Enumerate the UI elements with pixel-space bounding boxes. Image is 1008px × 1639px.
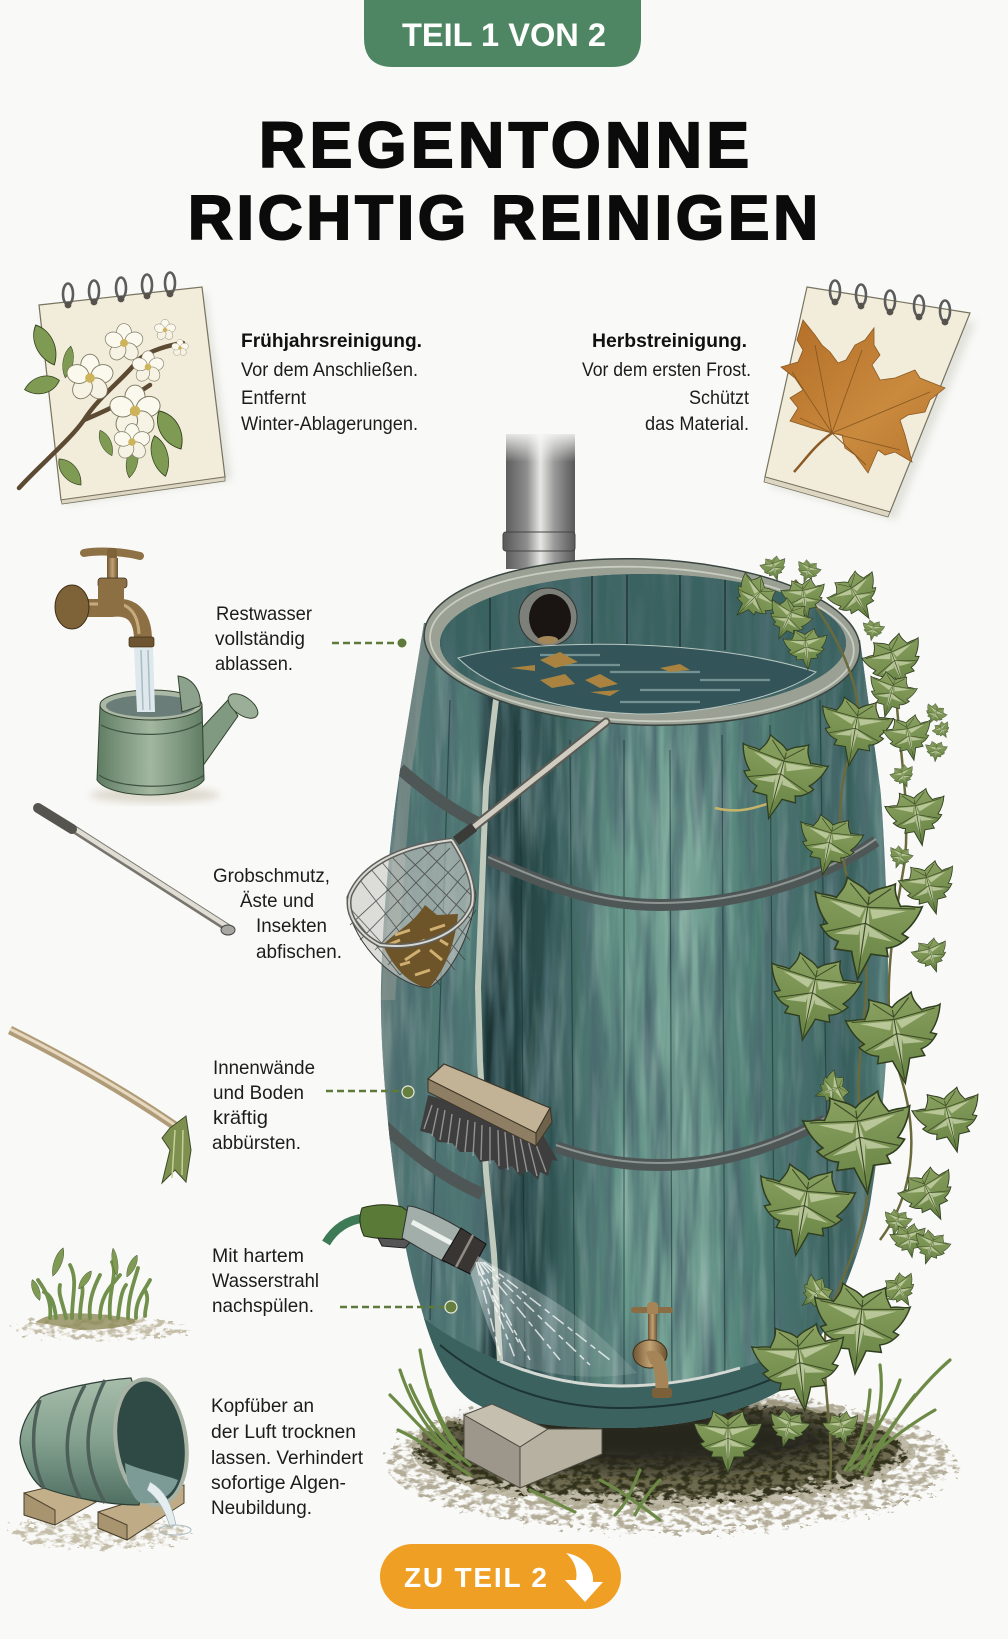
title (188, 109, 818, 253)
text: autumn cleaning: Schützt (689, 387, 750, 409)
text: rinse: Wasserstrahl (212, 1270, 319, 1292)
wood blocks (24, 1487, 96, 1525)
text: rest water (215, 603, 312, 675)
notebook: autumn maple leaf (764, 280, 976, 520)
watering can shadow (90, 787, 220, 803)
button: to part 2 (380, 1544, 621, 1609)
text: scrub: kräftig (213, 1107, 268, 1129)
text: remove debris: Äste und (240, 890, 314, 912)
text: autumn cleaning: das Material. (645, 413, 749, 435)
button: to part 2: ZU TEIL 2 (404, 1562, 547, 1593)
handle (470, 722, 606, 830)
callout line: rinse (340, 1301, 457, 1313)
hose (326, 1218, 364, 1243)
text: scrub (212, 1057, 315, 1154)
hoops (384, 769, 876, 1194)
faucet body (75, 608, 143, 640)
notebook: spring blossoms (19, 272, 232, 505)
text: spring cleaning: Winter-Ablagerungen. (241, 413, 418, 435)
text: remove debris: abfischen. (256, 941, 342, 963)
text: remove debris: Insekten (256, 915, 327, 937)
water spray (470, 1256, 637, 1377)
black collar (442, 1228, 486, 1274)
inlet hole (519, 588, 577, 646)
icon: long-handled brush with algae (10, 1029, 191, 1183)
text: dry upside down: sofortige Algen- (211, 1472, 346, 1494)
skimmer net (347, 722, 606, 988)
concrete block (464, 1404, 602, 1488)
text: dry upside down: lassen. Verhindert (211, 1447, 364, 1469)
text: remove debris (213, 865, 342, 963)
ground patch under barrel (385, 1392, 955, 1532)
callout line: rest water (332, 638, 406, 648)
text: scrub: abbürsten. (212, 1132, 301, 1154)
water surface (458, 644, 816, 714)
title: REGENTONNE (259, 109, 749, 181)
pale staves strip (478, 682, 500, 1361)
faucet handle (84, 552, 140, 556)
text: dry upside down: Kopfüber an (211, 1395, 314, 1417)
green coupling (360, 1205, 414, 1240)
text: rest water: ablassen. (215, 653, 293, 675)
text: autumn cleaning: Vor dem ersten Frost. (582, 359, 751, 381)
collected debris (383, 905, 458, 988)
text: dry upside down: Neubildung. (211, 1497, 312, 1519)
blossoms (65, 319, 189, 461)
barrel body (20, 1378, 151, 1505)
net hoop (349, 840, 473, 946)
text: spring cleaning: Entfernt (241, 387, 307, 409)
icon: grass tuft (12, 1247, 188, 1339)
text: dry upside down: der Luft trocknen (211, 1421, 356, 1443)
text: rinse (212, 1245, 319, 1317)
can spout (186, 700, 238, 775)
callout line: scrub walls (326, 1086, 414, 1098)
title: RICHTIG REINIGEN (188, 184, 818, 253)
rain barrel (370, 551, 900, 1440)
ivy leaves (720, 554, 990, 1416)
badge: part indicator: TEIL 1 VON 2 (402, 17, 606, 53)
text: spring cleaning: Frühjahrsreinigung. (241, 330, 422, 352)
text: spring cleaning: Vor dem Anschließen. (241, 359, 418, 381)
icon: faucet with watering can (55, 548, 262, 803)
text: scrub: Innenwände (213, 1057, 315, 1079)
icon: upturned drying barrel (10, 1375, 194, 1548)
text: rinse: Mit hartem (212, 1245, 304, 1267)
ivy vine stems (715, 580, 911, 1480)
can body (97, 705, 204, 795)
text: remove debris: Grobschmutz, (213, 865, 330, 887)
water stream (134, 648, 155, 712)
icon: telescopic rod (38, 808, 235, 935)
net bag (347, 840, 476, 988)
barrel opening (108, 1375, 194, 1509)
text: autumn cleaning (582, 330, 751, 435)
barrel interior (440, 570, 850, 714)
leaves (22, 321, 189, 490)
text: autumn cleaning: Herbstreinigung. (592, 330, 747, 352)
barrel body (370, 600, 900, 1440)
branch (19, 343, 183, 488)
barrel tap (633, 1302, 672, 1398)
icon: curved down arrow (565, 1553, 603, 1602)
ground plants (390, 1350, 950, 1520)
text: spring cleaning (241, 330, 422, 435)
text: dry upside down (211, 1395, 364, 1519)
draining water (147, 1482, 176, 1527)
hose nozzle (326, 1205, 486, 1274)
scrub brush (420, 1064, 558, 1180)
bottom band (424, 1318, 780, 1428)
maple leaf (781, 320, 945, 473)
metal barrel (402, 1206, 466, 1262)
text: scrub: und Boden (213, 1082, 304, 1104)
barrel rim (421, 551, 863, 733)
text: rinse: nachspülen. (212, 1295, 314, 1317)
text: rest water: Restwasser (216, 603, 312, 625)
downpipe (500, 430, 580, 569)
text: rest water: vollständig (215, 628, 305, 650)
badge: part indicator (364, 0, 641, 67)
